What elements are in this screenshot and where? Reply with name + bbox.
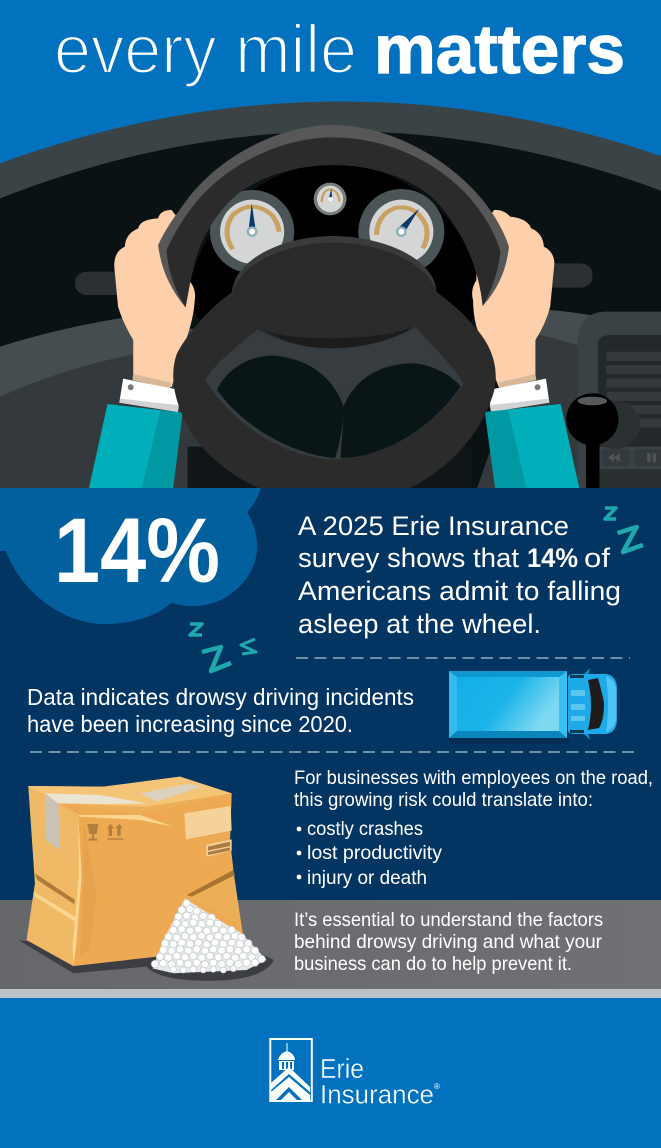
packing tape: [45, 793, 60, 851]
survey text: 14%: [527, 543, 578, 573]
centre console: [578, 312, 661, 490]
dashboard vent bars: [75, 263, 592, 295]
icon: truck from above: [449, 668, 617, 744]
survey text: A 2025 Erie Insurance: [298, 511, 569, 541]
sleep cloud: [0, 488, 261, 624]
survey text: Americans admit to falling: [298, 576, 621, 606]
statistic: 14%: 14%: [54, 500, 220, 602]
gear shift: [566, 393, 640, 490]
survey text: asleep at the wheel.: [298, 609, 541, 639]
illustration: driver's hands on steering wheel: [0, 101, 661, 505]
logo wordmark: Erie: [320, 1053, 364, 1084]
risk text: [294, 768, 653, 811]
logo mark: building: [270, 1039, 312, 1101]
prevention text: business can do to help prevent it.: [294, 954, 572, 975]
seats: [217, 356, 344, 458]
risk bullet list: [297, 819, 442, 889]
box body: [27, 777, 245, 966]
bottom blue footer: [0, 998, 661, 1148]
fragile icons: [87, 824, 123, 841]
title: matters: [374, 11, 625, 88]
grey floor band: [0, 900, 661, 989]
truck cab: [568, 668, 617, 740]
logo: Erie Insurance: ®: [434, 1082, 440, 1091]
wheel rim top: [158, 125, 509, 307]
prevention text: It’s essential to understand the factors: [294, 910, 603, 931]
navy information panel: [0, 488, 661, 900]
icon: sleep z's top right: [605, 508, 643, 552]
left hand: [89, 210, 195, 490]
left gauge: [210, 190, 294, 273]
wheel hub: [232, 236, 436, 293]
drowsy driving data text: have been increasing since 2020.: [27, 711, 353, 737]
drowsy driving data text: Data indicates drowsy driving incidents: [27, 684, 414, 710]
risk text: this growing risk could translate into:: [294, 790, 593, 811]
risk bullet list: costly crashes: [307, 819, 423, 840]
survey text: survey shows that: [298, 543, 520, 573]
wheel lower ring: [173, 292, 496, 505]
survey text: of: [584, 543, 611, 573]
risk bullet list: lost productivity: [307, 843, 442, 864]
title: [54, 11, 625, 88]
lower cabin dark area: [188, 446, 211, 488]
logo wordmark: [320, 1053, 434, 1110]
prevention text: [294, 910, 603, 975]
title: every mile: [54, 11, 357, 88]
survey text: [298, 511, 621, 639]
shipping label: [184, 806, 232, 839]
prevention text: behind drowsy driving and what your: [294, 932, 603, 953]
icon: sleep z's by cloud: [190, 624, 256, 671]
illustration: damaged box with spilled packing peanuts: [18, 777, 274, 981]
risk bullet list: injury or death: [307, 868, 427, 889]
right hand: [472, 210, 580, 490]
steering wheel: [158, 125, 509, 505]
top blue background: [0, 0, 661, 500]
small gauge: [314, 183, 347, 215]
logo: Erie Insurance: [270, 1039, 440, 1110]
packing peanuts: [151, 898, 267, 973]
logo wordmark: Insurance: [320, 1080, 434, 1110]
drowsy driving data text: [27, 684, 414, 737]
risk text: For businesses with employees on the road,: [294, 768, 653, 789]
instrument cluster: [188, 163, 485, 327]
right gauge: [358, 189, 444, 274]
